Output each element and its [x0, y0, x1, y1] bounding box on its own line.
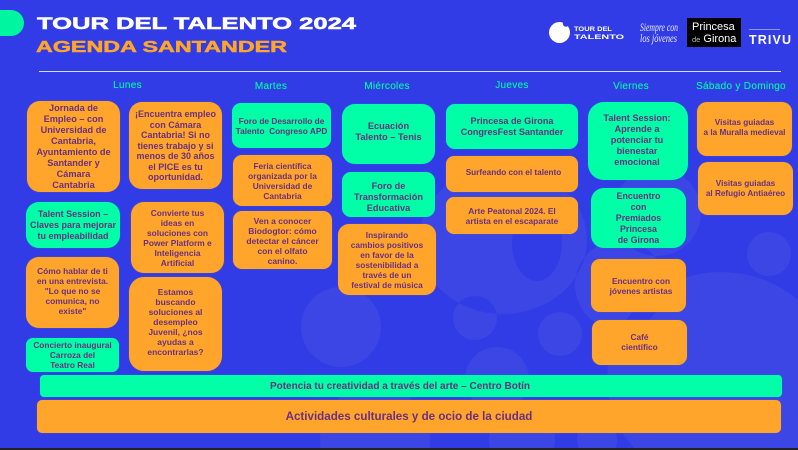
- event: Estamos buscando: ayudas a: [157, 336, 194, 346]
- event: Talent Session bienestar: [588, 102, 688, 180]
- event: Jornada de Empleo: Jornada de: [49, 102, 98, 112]
- event: Encuentra empleo: tienes trabajo y si: [137, 141, 214, 151]
- event: Jornada de Empleo: Cantabria,: [51, 136, 96, 146]
- event: Ecuación Talento: [342, 104, 435, 164]
- event: Convierte tus ideas: Power Platform e: [143, 238, 212, 248]
- event: Jornada de Empleo: Santander y: [47, 158, 100, 168]
- event: Encuentro con Premiados: Encuentro: [617, 190, 660, 200]
- event: Encuentra empleo: el PICE es tu: [148, 162, 203, 172]
- event: Concierto inaugural: Teatro Real: [50, 360, 95, 370]
- day label: Jueves: Jueves: [495, 80, 529, 91]
- event: Encuentro con Premiados: Premiados: [616, 212, 661, 222]
- logo: Tour del Talento: [549, 22, 624, 43]
- event: Inspirando cambios: sostenibilidad a: [356, 260, 418, 270]
- event: Estamos buscando: encontrarlas?: [147, 346, 204, 356]
- event: Jornada de Empleo: Cantabria: [52, 180, 95, 190]
- banner: Centro Botín: Potencia tu creatividad a través del arte – Centro Botín: [270, 380, 530, 392]
- event: Foro de Transformación: Educativa: [367, 202, 410, 212]
- day label: Lunes: Lunes: [113, 80, 142, 91]
- banner: Actividades culturales: Actividades culturales y de ocio de la ciudad: [286, 410, 532, 422]
- event: Foro de Desarrollo: Talento Congreso APD: [236, 126, 327, 136]
- event: Estamos buscando: [129, 277, 222, 371]
- event: Concierto inaugural: Concierto inaugural: [33, 340, 112, 350]
- day label: Miércoles: Miércoles: [364, 81, 410, 92]
- event: Feria científica: organizada por la: [248, 170, 317, 180]
- event: Inspirando cambios: cambios positivos: [351, 240, 423, 250]
- event: Concierto inaugural: Carroza del: [50, 350, 95, 360]
- event: Convierte tus ideas: Inteligencia: [154, 248, 201, 258]
- day label: Sábado y Domingo: Sábado y Domingo: [696, 81, 786, 92]
- logo: Tour del Talento: TOUR DEL: [574, 26, 612, 33]
- event: Cómo hablar de ti: en una entrevista.: [37, 276, 108, 286]
- event: Convierte tus ideas: [131, 202, 224, 273]
- event: Biodogtor: detectar el cáncer: [246, 236, 319, 246]
- event: Jornada de Empleo: [27, 101, 120, 192]
- title: TOUR DEL TALENTO 2024: [37, 15, 357, 33]
- bottom dark strip: [0, 448, 798, 450]
- event: Biodogtor: Biodogtor: cómo: [248, 226, 317, 236]
- event: Encuentra empleo: oportunidad.: [148, 172, 203, 182]
- event: Cómo hablar de ti: "Lo que no se: [45, 286, 100, 296]
- event: Encuentra empleo: Cantabria! Si no: [141, 130, 210, 140]
- event: Encuentro con Premiados: de Girona: [618, 234, 659, 244]
- event: Talent Session bienestar: potenciar tu: [611, 134, 663, 144]
- event: Refugio Antiaéreo: Visitas guiadas: [716, 178, 775, 188]
- event: Talent Session bienestar: Talent Session:: [603, 112, 671, 122]
- event: Ecuación Talento: Talento – Tenis: [355, 132, 422, 142]
- event: Surfeando: [446, 156, 578, 192]
- event: Biodogtor: con el olfato: [257, 246, 308, 256]
- event: Talent Session bienestar: emocional: [614, 156, 660, 166]
- event: Princesa de Girona CongresFest: CongresFest Santander: [461, 126, 563, 136]
- event: Inspirando cambios: [338, 224, 436, 295]
- event: Biodogtor: canino.: [268, 256, 297, 266]
- logo: Siempre con los jóvenes: [640, 20, 678, 45]
- event: Talent Session empleabilidad: tu empleabilidad: [37, 231, 108, 241]
- event: Foro de Desarrollo: Foro de Desarrollo de: [239, 116, 324, 126]
- logo: Princesa de Girona: Princesa: [692, 20, 735, 32]
- event: Convierte tus ideas: ideas en: [161, 218, 194, 228]
- event: Encuentro con jóvenes artistas: Encuentro con: [612, 276, 670, 286]
- event: Foro de Transformación: [342, 172, 435, 217]
- event: Encuentro con jóvenes artistas: [591, 259, 686, 312]
- event: Foro de Transformación: Foro de: [372, 180, 405, 190]
- event: Talent Session bienestar: Aprende a: [615, 124, 659, 134]
- event: Convierte tus ideas: Artificial: [161, 258, 194, 268]
- day label: Viernes: Viernes: [613, 81, 649, 92]
- event: Encuentra empleo: con Cámara: [150, 120, 201, 130]
- event: Café científico: Café: [630, 332, 648, 342]
- event: Jornada de Empleo: Cámara: [57, 168, 90, 178]
- event: Concierto inaugural: [26, 338, 119, 372]
- event: Muralla medieval: Visitas guiadas: [715, 118, 774, 127]
- event: Encuentro con Premiados: con: [631, 202, 646, 212]
- event: Encuentra empleo: ¡Encuentra empleo: [135, 109, 216, 119]
- event: Convierte tus ideas: soluciones con: [147, 228, 208, 238]
- logo: Tour del Talento: TALENTO: [574, 34, 624, 41]
- banner: Actividades culturales: [37, 400, 781, 433]
- event: Arte Peatonal: artista en el escaparate: [466, 216, 558, 226]
- event: Inspirando cambios: Inspirando: [366, 230, 408, 240]
- divider: [39, 71, 781, 72]
- event: Café científico: científico: [621, 342, 658, 352]
- event: Feria científica: Cantabria: [263, 190, 302, 200]
- day label: Martes: Martes: [255, 81, 287, 92]
- event: Estamos buscando: Juvenil, ¿nos: [148, 326, 203, 336]
- event: Talent Session empleabilidad: [26, 202, 120, 248]
- title: [36, 15, 357, 56]
- logo: Princesa de Girona: [687, 18, 741, 47]
- event: Feria científica: [233, 155, 332, 206]
- event: Encuentro con Premiados: [591, 188, 686, 248]
- event: Cómo hablar de ti: existe": [59, 306, 86, 316]
- event: Surfeando: Surfeando con el talento: [466, 168, 561, 176]
- event: Jornada de Empleo: Ayuntamiento de: [36, 146, 111, 156]
- event: Talent Session bienestar: bienestar: [617, 146, 657, 156]
- event: Foro de Transformación: Transformación: [354, 192, 423, 202]
- event: Feria científica: Feria científica: [253, 160, 312, 170]
- event: Arte Peatonal: [446, 197, 578, 234]
- event: Ecuación Talento: Ecuación: [368, 120, 409, 130]
- banner: Centro Botín: [40, 375, 782, 397]
- green header pill: [0, 10, 24, 36]
- event: Princesa de Girona CongresFest: Princesa de Girona: [471, 116, 553, 126]
- event: Refugio Antiaéreo: al Refugio Antiaéreo: [706, 188, 785, 198]
- event: Encuentra empleo: [129, 102, 222, 189]
- event: Estamos buscando: Estamos: [158, 286, 193, 296]
- event: Muralla medieval: [697, 102, 792, 156]
- event: Feria científica: Universidad de: [253, 180, 312, 190]
- event: Talent Session empleabilidad: Claves para mejorar: [30, 220, 116, 230]
- event: Cómo hablar de ti: [26, 257, 119, 328]
- event: Arte Peatonal: Arte Peatonal 2024. El: [468, 206, 556, 216]
- event: Estamos buscando: soluciones al: [149, 306, 202, 316]
- event: Princesa de Girona CongresFest: [446, 104, 578, 149]
- event: Refugio Antiaéreo: [698, 162, 793, 215]
- event: Inspirando cambios: en favor de la: [360, 250, 414, 260]
- event: Estamos buscando: buscando: [155, 296, 196, 306]
- event: Inspirando cambios: festival de música: [351, 280, 423, 290]
- event: Estamos buscando: desempleo: [153, 316, 198, 326]
- event: Biodogtor: [233, 211, 332, 269]
- event: Convierte tus ideas: Convierte tus: [151, 208, 204, 218]
- event: Biodogtor: Ven a conocer: [254, 216, 311, 226]
- event: Inspirando cambios: través de un: [363, 270, 411, 280]
- logo: Princesa de Girona: de Girona: [692, 32, 736, 44]
- event: Café científico: [592, 320, 687, 365]
- event: Talent Session empleabilidad: Talent Session –: [38, 209, 108, 219]
- event: Cómo hablar de ti: comunica, no: [46, 296, 99, 306]
- event: Encuentra empleo: menos de 30 años: [136, 151, 215, 161]
- event: Encuentro con jóvenes artistas: jóvenes artistas: [610, 286, 672, 296]
- event: Cómo hablar de ti: Cómo hablar de ti: [37, 266, 108, 276]
- event: Jornada de Empleo: Empleo – con: [44, 114, 103, 124]
- event: Foro de Desarrollo: [232, 103, 331, 148]
- event: Encuentro con Premiados: Princesa: [620, 224, 657, 234]
- event: Muralla medieval: a la Muralla medieval: [704, 128, 785, 137]
- event: Jornada de Empleo: Universidad de: [41, 124, 106, 134]
- subtitle: AGENDA SANTANDER: [36, 39, 288, 56]
